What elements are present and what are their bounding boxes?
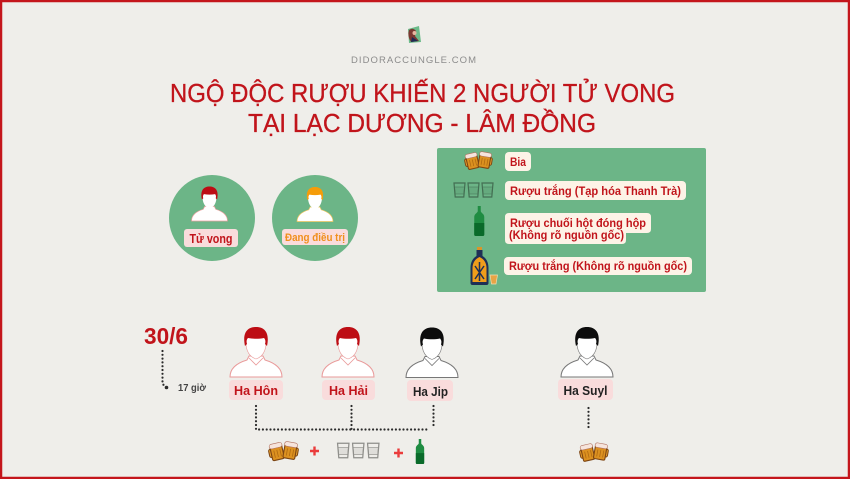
person: Ha Hôn: Ha Hôn	[234, 383, 278, 398]
icon: three glasses	[338, 443, 379, 458]
icon: beer mugs	[578, 443, 609, 462]
date: 30/6: 30/6	[144, 323, 188, 349]
label: white liquor unknown origin: Rượu trắng (Không rõ nguồn gốc)	[509, 258, 687, 273]
person: Ha Hải	[322, 327, 375, 400]
label: white liquor from Thanh Tra shop: Rượu trắng (Tạp hóa Thanh Trà)	[510, 183, 681, 198]
icon: green bottle	[474, 206, 484, 236]
label: banana seed liquor: Rượu chuối hột đóng hộp	[510, 216, 646, 230]
icon: beer mugs	[463, 151, 493, 170]
icon: site logo	[408, 26, 421, 43]
label: deceased	[184, 229, 238, 247]
connector: Ha Suyl drinks	[587, 408, 590, 429]
icon: plus	[394, 448, 403, 458]
label: banana seed liquor: (Không rõ nguồn gốc)	[509, 228, 624, 242]
icon: orange-haired person	[297, 187, 333, 222]
person: Ha Jip: Ha Jip	[413, 384, 448, 399]
panel: alcohol legend	[437, 148, 706, 292]
panel: status legend, in treatment	[272, 175, 358, 261]
time label: 17 giờ	[178, 383, 207, 394]
title: TẠI LẠC DƯƠNG - LÂM ĐỒNG	[248, 108, 596, 138]
title	[170, 77, 675, 138]
label: white liquor from Thanh Tra shop	[505, 181, 686, 200]
icon: red-haired person	[192, 186, 227, 221]
label: banana seed liquor	[505, 213, 651, 244]
panel: status legend, in treatment: Đang điều trị	[285, 232, 345, 244]
icon: green bottle	[416, 439, 424, 464]
person: Ha Jip	[406, 328, 458, 401]
person: Ha Hôn	[229, 327, 283, 400]
label: beer	[505, 152, 531, 171]
timeline connector	[162, 351, 165, 386]
person: Ha Suyl	[558, 327, 613, 400]
person: Ha Hải: Ha Hải	[329, 383, 368, 398]
label: in treatment	[282, 229, 348, 245]
label: beer: Bia	[510, 155, 526, 169]
icon: three glasses	[454, 183, 493, 197]
icon: decorated liquor bottle and small glass	[470, 247, 498, 285]
time dot	[165, 386, 168, 389]
title: NGỘ ĐỘC RƯỢU KHIẾN 2 NGƯỜI TỬ VONG	[170, 77, 675, 108]
icon: beer mugs	[267, 441, 299, 461]
person: Ha Suyl: Ha Suyl	[564, 383, 608, 398]
connector: shared drinks	[256, 406, 434, 430]
icon: plus	[310, 446, 319, 456]
panel: status legend, deceased: Tử vong	[190, 232, 232, 246]
panel: status legend, deceased	[169, 175, 255, 261]
site name: DIDORACCUNGLE.COM	[351, 55, 476, 66]
